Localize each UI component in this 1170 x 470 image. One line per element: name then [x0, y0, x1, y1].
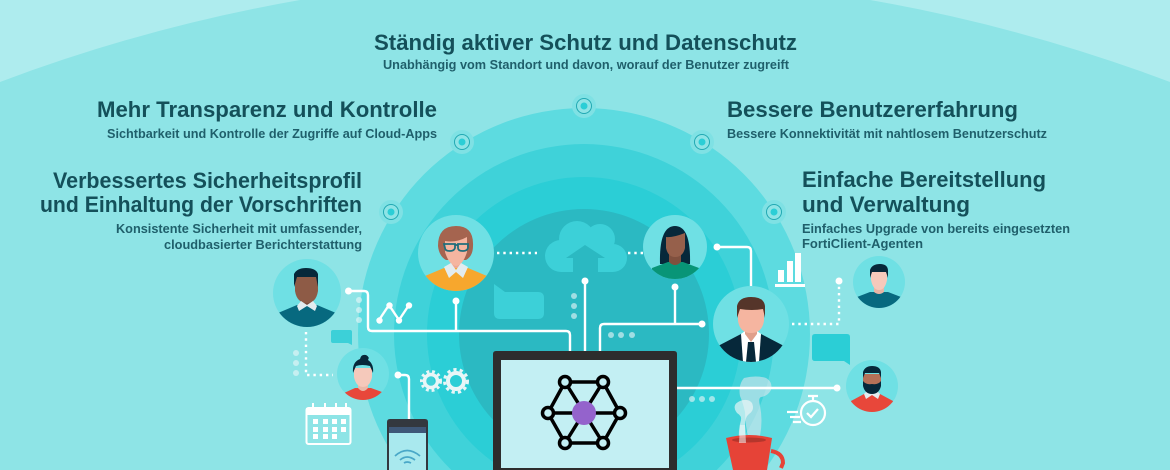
avatar: man in suit: [713, 286, 789, 363]
text: security profile: [116, 222, 362, 252]
avatar: woman in red: [337, 348, 389, 401]
text: deployment: [802, 222, 1070, 251]
connector lines: [345, 244, 842, 420]
icon: smartphone: [387, 419, 428, 470]
dotted connectors: [306, 253, 839, 375]
ring node: upper left: [450, 130, 474, 154]
ring node: upper right: [690, 130, 714, 154]
icon: gears: [422, 370, 468, 392]
icon: small chat bubble: [331, 330, 352, 345]
icon: cloud upload: [545, 221, 627, 273]
heading: user experience: Bessere Benutzererfahrung: [727, 97, 1018, 122]
avatar: bearded man in red: [846, 360, 898, 413]
icon: right chat bubble: [812, 334, 850, 365]
icon: network hexagon: [542, 376, 626, 448]
heading: security profile: Verbessertes Sicherheitsprofil: [53, 168, 362, 193]
text: transparency: Sichtbarkeit und Kontrolle der Zugriffe auf Cloud-Apps: [107, 127, 437, 141]
heading: top: Ständig aktiver Schutz und Datenschutz: [374, 30, 797, 55]
icon: coffee steam: [735, 376, 771, 443]
text: security profile: cloudbasierter Berichterstattung: [164, 238, 362, 252]
heading: transparency: Mehr Transparenz und Kontrolle: [97, 97, 437, 122]
heading: security profile: und Einhaltung der Vorschriften: [40, 192, 362, 217]
avatar: woman with glasses: [418, 215, 494, 292]
icon: centre chat bubble: [494, 284, 544, 319]
text: top: Unabhängig vom Standort und davon, worauf der Benutzer zugreift: [383, 58, 790, 72]
ring node: left: [379, 200, 403, 224]
heading: security profile: [40, 168, 362, 217]
avatar: dark-haired woman in green: [643, 215, 707, 280]
icon: line chart: [376, 302, 412, 324]
concentric rings: [358, 108, 810, 470]
text: security profile: Konsistente Sicherheit mit umfassender,: [116, 222, 362, 236]
heading: deployment: Einfache Bereitstellung: [802, 167, 1046, 192]
icon: calendar: [306, 403, 351, 444]
status dots: [293, 293, 715, 402]
avatar: man in teal sweater: [273, 259, 341, 328]
monitor: [493, 351, 677, 470]
text: deployment: FortiClient-Agenten: [802, 237, 923, 251]
ring node: right: [762, 200, 786, 224]
heading: deployment: [802, 167, 1046, 217]
text: deployment: Einfaches Upgrade von bereits eingesetzten: [802, 222, 1070, 236]
icon: bar chart: [775, 253, 805, 287]
icon: coffee cup: [726, 425, 783, 470]
icon: stopwatch: [787, 396, 825, 425]
avatar: man top right: [853, 256, 905, 309]
text: user experience: Bessere Konnektivität mit nahtlosem Benutzerschutz: [727, 127, 1047, 141]
ring node: top: [572, 94, 596, 118]
heading: deployment: und Verwaltung: [802, 192, 970, 217]
